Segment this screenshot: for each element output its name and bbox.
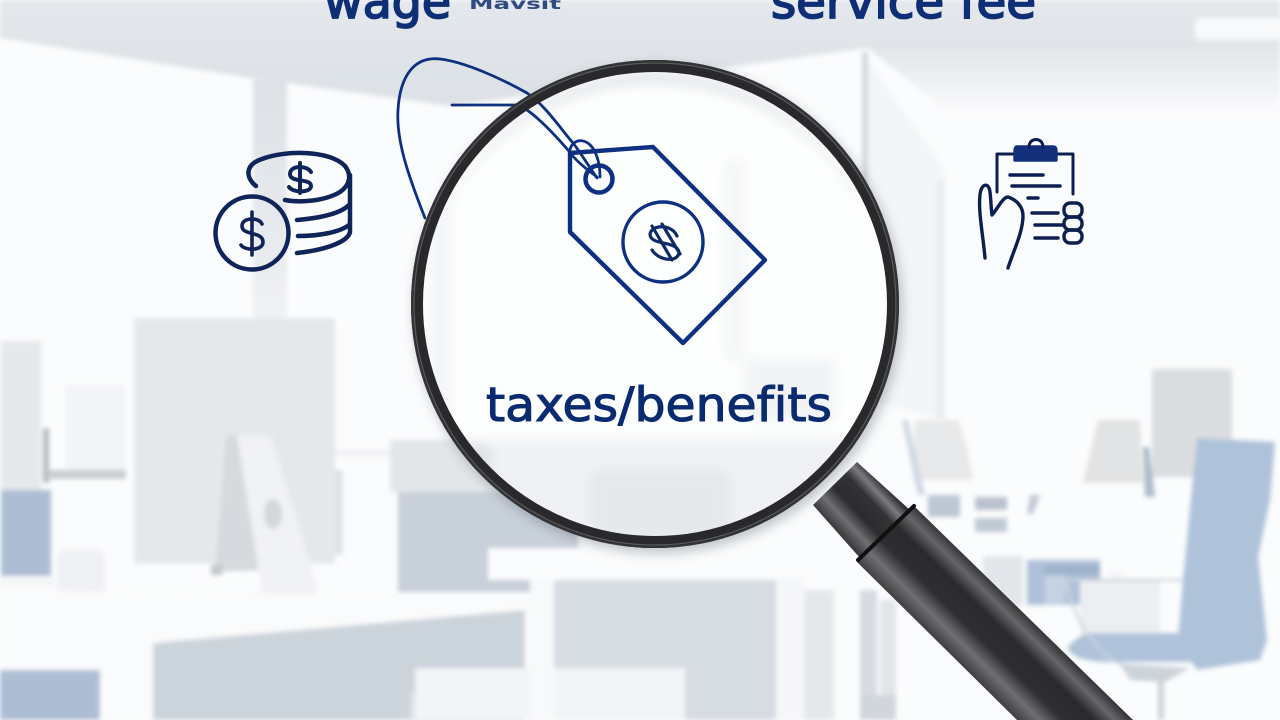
- magnifying glass rim: [412, 61, 898, 547]
- icon: clipboard with hand: [980, 140, 1082, 268]
- icon: price tag string outside lens: [398, 59, 527, 218]
- icon: stacked coins: [216, 153, 350, 270]
- right workstation: [860, 369, 1275, 720]
- left workstation: [0, 318, 580, 720]
- magnifying glass handle: [813, 462, 1133, 720]
- lens glass: [414, 65, 902, 553]
- icon: price tag: [517, 93, 765, 343]
- window pillars and glass partition: [253, 52, 945, 420]
- center desk: [415, 548, 858, 720]
- lens label: taxes/benefits: taxes/benefits: [486, 378, 832, 433]
- ceiling: [0, 0, 1280, 115]
